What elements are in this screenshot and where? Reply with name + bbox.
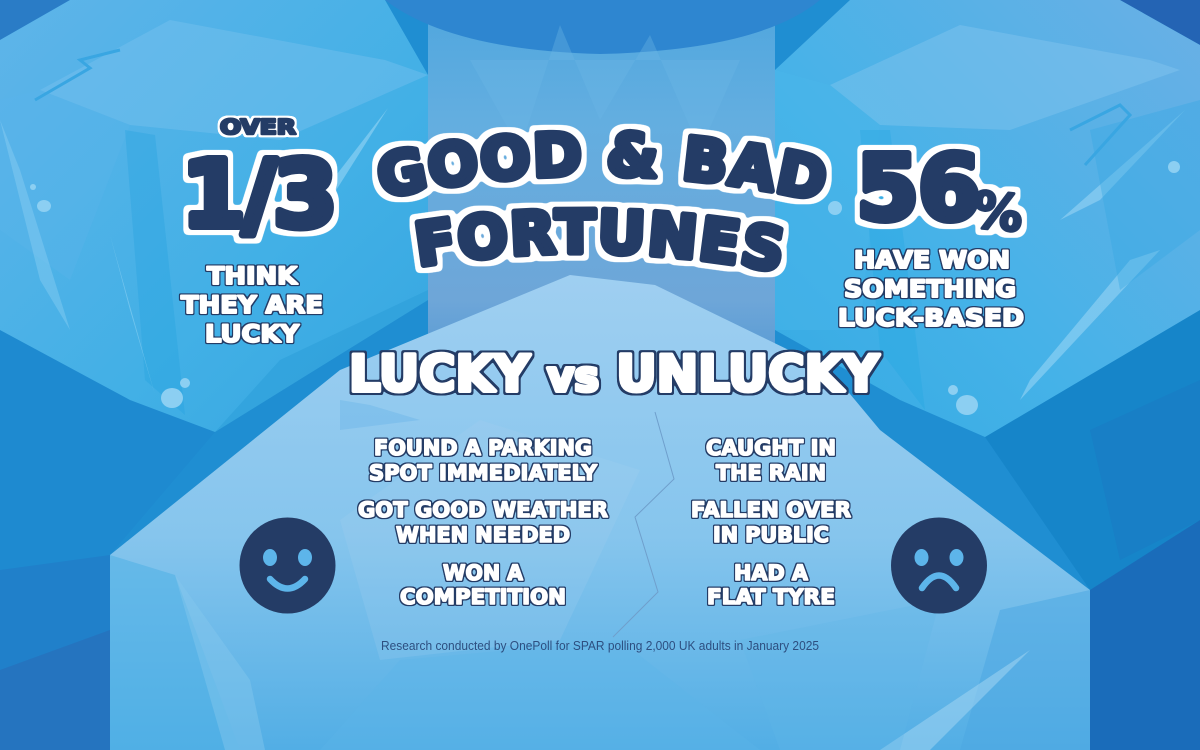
lucky list: SPOT IMMEDIATELY: [369, 461, 598, 485]
source note: Research conducted by OnePoll for SPAR polling 2,000 UK adults in January 2025: [381, 639, 819, 653]
background: right ice cube: [775, 0, 1200, 437]
have won something luck-based text: HAVE WON: [854, 246, 1010, 274]
unlucky list: IN PUBLIC: [713, 523, 829, 547]
lucky list: GOT GOOD WEATHER: [358, 498, 608, 522]
title: [372, 124, 832, 278]
background: bottom ice block: [110, 275, 1090, 750]
title: GOOD & BAD: [372, 124, 832, 204]
lucky list: WON A: [443, 561, 524, 585]
title: FORTUNES: [409, 201, 789, 278]
icon: happy face: [240, 518, 336, 614]
lucky list: FOUND A PARKING: [374, 436, 592, 460]
unlucky list: FALLEN OVER: [691, 498, 851, 522]
unlucky list: FLAT TYRE: [707, 585, 835, 609]
think they are lucky text: [181, 262, 323, 348]
think they are lucky text: THEY ARE: [181, 291, 323, 319]
have won something luck-based text: [838, 246, 1024, 332]
56% figure: %: [970, 181, 1026, 244]
lucky list: WHEN NEEDED: [396, 523, 570, 547]
one third figure: 1/3: [182, 141, 334, 248]
unlucky list: HAD A: [734, 561, 809, 585]
56% figure: 56: [856, 136, 980, 241]
fifty six percent stat: [838, 136, 1026, 332]
unlucky list: CAUGHT IN: [706, 436, 836, 460]
lucky vs unlucky heading: LUCKY vs UNLUCKY: [349, 345, 880, 403]
think they are lucky text: LUCKY: [205, 320, 300, 348]
lucky list: COMPETITION: [400, 585, 566, 609]
icon: sad face: [891, 518, 987, 614]
have won something luck-based text: LUCK-BASED: [838, 304, 1024, 332]
background: left ice cube: [0, 0, 428, 432]
unlucky list: THE RAIN: [716, 461, 826, 485]
lucky list: [358, 436, 608, 609]
over one third stat: [181, 115, 334, 348]
think they are lucky text: THINK: [207, 262, 298, 290]
have won something luck-based text: SOMETHING: [844, 275, 1016, 303]
unlucky list: [691, 436, 851, 609]
over label: OVER: [220, 115, 296, 139]
